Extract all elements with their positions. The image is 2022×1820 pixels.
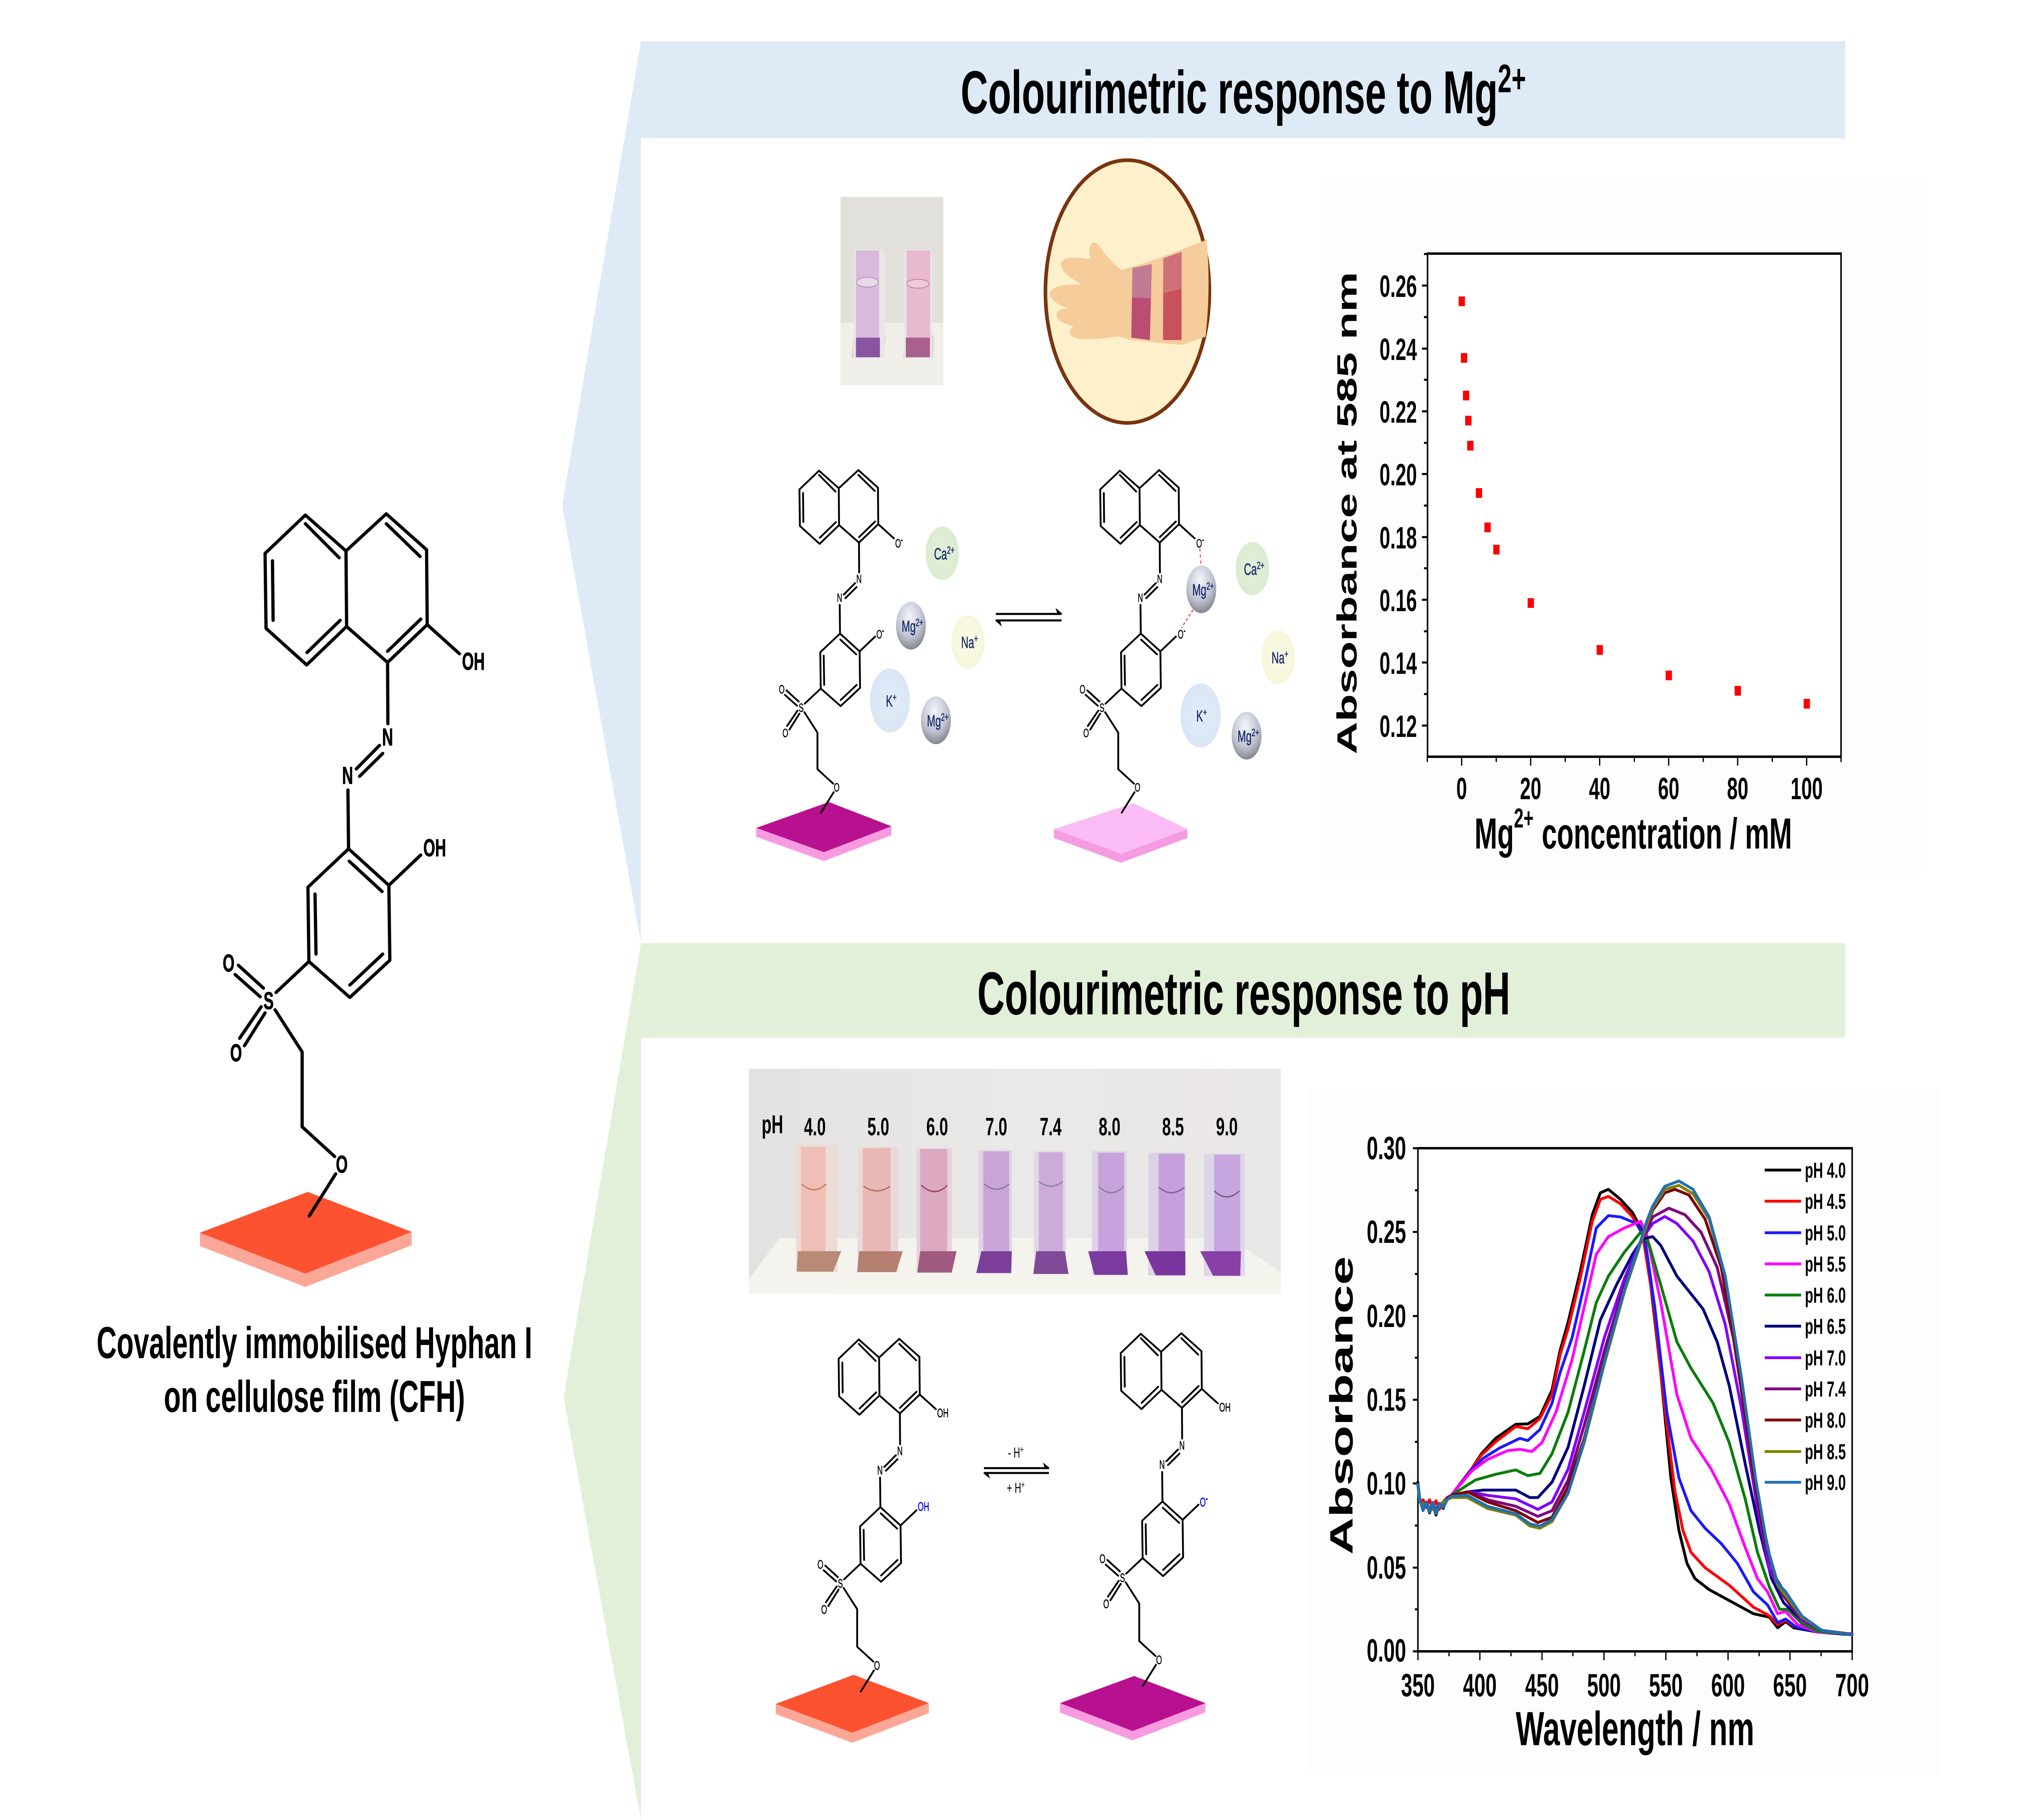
ions: left group: 2+ (941, 711, 948, 723)
x tick labels: 60 (1658, 772, 1679, 806)
axis title x: Mg (1474, 809, 1514, 858)
ions: right group: Mg (1192, 581, 1206, 599)
x tick labels (1456, 772, 1823, 806)
molecule: protonated dye: O (817, 1558, 823, 1572)
molecule: Hyphan I: O (223, 950, 235, 977)
pH labels: 5.0 (867, 1113, 889, 1141)
ions: left group: 2+ (916, 616, 923, 629)
legend: pH 6.0 (1805, 1283, 1846, 1308)
x tick labels: 400 (1463, 1668, 1497, 1704)
arrow: pH equilibrium (983, 1445, 1050, 1496)
film plate: pink, Mg bound (1054, 803, 1187, 863)
ions: right group: K (1196, 707, 1203, 726)
molecule: deprotonated dye, left (779, 470, 903, 813)
heading: Mg response (641, 41, 1845, 138)
x tick labels: 450 (1525, 1668, 1559, 1704)
arrow: pH equilibrium: + (1020, 1445, 1024, 1455)
x tick labels: 700 (1835, 1668, 1869, 1704)
arrow: pH equilibrium: + (1021, 1480, 1025, 1490)
molecule: deprotonated dye, left: - (901, 535, 903, 545)
molecule: Mg complex, right: O (1080, 683, 1085, 696)
ions: right group: 2+ (1257, 559, 1264, 571)
ions: right group: + (1203, 706, 1207, 718)
axis title y: Absorbance at 585 nm (1332, 272, 1362, 754)
axis title x: Wavelength / nm (1516, 1702, 1754, 1756)
y tick labels: 0.18 (1379, 521, 1417, 555)
pH labels: 6.0 (926, 1113, 948, 1141)
legend: pH 4.5 (1805, 1189, 1846, 1214)
molecule: deprotonated dye, left: O (779, 683, 785, 696)
ions: left group: K (886, 692, 893, 711)
dashed coordination bonds (1182, 548, 1201, 628)
molecule: Mg complex, right: S (1100, 702, 1104, 715)
y tick labels (1379, 270, 1417, 744)
x tick labels: 40 (1589, 772, 1610, 806)
heading: pH response: Colourimetric response to pH (977, 959, 1510, 1027)
molecule: Mg complex, right: - (1202, 535, 1204, 545)
pH labels: 8.5 (1162, 1113, 1184, 1141)
film plate: red (200, 1192, 412, 1287)
x tick labels: 100 (1791, 772, 1823, 806)
pH labels: 7.4 (1040, 1113, 1062, 1141)
y tick labels: 0.25 (1367, 1214, 1406, 1250)
molecule: Hyphan I: S (264, 987, 274, 1014)
molecule: Hyphan I: N (382, 724, 393, 751)
arrow: Mg equilibrium (995, 608, 1063, 626)
molecule: Mg complex, right: O (1083, 727, 1089, 740)
molecule: deprotonated dye: O (1100, 1552, 1105, 1566)
legend: pH 7.0 (1805, 1346, 1846, 1370)
molecule: deprotonated dye: O (1200, 1496, 1206, 1509)
heading: pH response (641, 943, 1845, 1038)
x tick labels: 500 (1587, 1668, 1621, 1704)
film plate: magenta, deprotonated (1060, 1676, 1206, 1740)
molecule: protonated dye: OH (918, 1500, 929, 1514)
molecule: Mg complex, right: N (1157, 573, 1162, 586)
molecule: deprotonated dye: OH (1219, 1401, 1231, 1414)
axis title x: concentration / mM (1542, 809, 1792, 858)
caption: Covalently immobilised Hyphan I (97, 1318, 532, 1368)
x tick labels: 550 (1649, 1668, 1683, 1704)
legend: pH 5.5 (1805, 1252, 1846, 1276)
x tick labels: 650 (1773, 1668, 1807, 1704)
panel: Mg response arrow background (562, 41, 641, 943)
molecule: Mg complex, right: O (1135, 781, 1140, 794)
y tick labels: 0.16 (1379, 584, 1417, 618)
molecule: Hyphan I: N (342, 762, 353, 789)
legend: pH 8.0 (1805, 1408, 1846, 1433)
molecule: deprotonated dye, left: O (895, 537, 901, 550)
ions: left group: 2+ (947, 544, 954, 556)
molecule: deprotonated dye: - (1206, 1494, 1208, 1504)
legend: pH 7.4 (1805, 1377, 1846, 1401)
ions: left group (870, 527, 985, 744)
film plate: dark magenta, Mg free (756, 802, 891, 861)
molecule: deprotonated dye: N (1159, 1458, 1165, 1472)
spectra curves (1418, 1181, 1852, 1635)
y tick labels: 0.15 (1367, 1382, 1406, 1418)
x tick labels: 350 (1401, 1668, 1435, 1704)
molecule: Mg complex, right: O (1196, 537, 1202, 550)
ions: left group: Mg (902, 618, 916, 636)
molecule: deprotonated dye: O (1156, 1653, 1162, 1667)
y tick labels: 0.26 (1379, 270, 1417, 304)
axis title y: Absorbance (1323, 1256, 1360, 1555)
molecule: protonated dye: N (877, 1464, 883, 1477)
ions: right group: + (1284, 648, 1288, 660)
molecule: deprotonated dye, left: - (882, 626, 884, 636)
molecule: deprotonated dye: N (1179, 1439, 1185, 1452)
panel: pH response arrow background (564, 943, 641, 1820)
pH labels: 8.0 (1099, 1113, 1121, 1141)
x tick labels: 600 (1711, 1668, 1745, 1704)
data points (1459, 296, 1810, 709)
ions: right group: 2+ (1252, 726, 1259, 739)
y tick labels: 0.20 (1367, 1298, 1406, 1334)
molecule: protonated dye: N (897, 1445, 903, 1458)
heading: Mg response: 2+ (1498, 57, 1526, 101)
y tick labels: 0.14 (1379, 647, 1417, 681)
pH labels: 7.0 (986, 1113, 1007, 1141)
heading: Mg response: Colourimetric response to Mg (961, 58, 1498, 126)
ions: right group (1180, 542, 1295, 760)
molecule: deprotonated dye: S (1120, 1571, 1125, 1585)
y tick labels: 0.05 (1367, 1550, 1406, 1586)
arrow: pH equilibrium: - H (1008, 1445, 1020, 1461)
molecule: protonated dye (817, 1339, 948, 1691)
molecule: protonated dye: S (838, 1577, 843, 1591)
y tick labels: 0.22 (1379, 396, 1417, 430)
photo: pH cuvette series (749, 1069, 1281, 1294)
molecule: Hyphan I: O (230, 1039, 242, 1067)
caption: on cellulose film (CFH) (164, 1372, 465, 1422)
molecule: protonated dye: O (821, 1603, 827, 1617)
molecule: deprotonated dye: O (1103, 1598, 1109, 1611)
molecule: Hyphan I: OH (423, 834, 446, 861)
y tick labels (1367, 1130, 1406, 1669)
x tick labels: 80 (1727, 772, 1748, 806)
ions: left group: Mg (927, 712, 941, 730)
molecule: Mg complex, right: N (1138, 592, 1143, 605)
chart: absorbance vs Mg concentration (1322, 178, 1921, 874)
y tick labels: 0.12 (1379, 710, 1417, 744)
legend: pH 6.5 (1805, 1314, 1846, 1339)
molecule: protonated dye: OH (937, 1407, 948, 1420)
molecule: deprotonated dye, left: N (837, 592, 842, 605)
axis title x: 2+ (1514, 803, 1533, 834)
pH labels: 9.0 (1216, 1113, 1238, 1141)
molecule: protonated dye: O (874, 1659, 880, 1673)
y tick labels: 0.10 (1367, 1466, 1406, 1502)
legend: pH 5.0 (1805, 1221, 1846, 1245)
y tick labels: 0.24 (1379, 333, 1417, 367)
y tick labels: 0.30 (1367, 1130, 1406, 1166)
molecule: Hyphan I: OH (462, 648, 485, 675)
photo: wearable film on baby doll arm (1045, 160, 1210, 423)
arrow: pH equilibrium: + H (1007, 1480, 1021, 1496)
legend: pH 8.5 (1805, 1439, 1846, 1464)
film plate: red, protonated (776, 1675, 929, 1743)
molecule: deprotonated dye, left: O (783, 727, 788, 740)
ions: left group: + (893, 691, 897, 703)
ions: right group: Na (1271, 649, 1284, 667)
chart: absorbance spectra vs pH (1309, 1088, 1941, 1776)
ions: right group: Ca (1244, 561, 1257, 579)
photo: two cuvettes (840, 197, 943, 385)
molecule: deprotonated dye, left: S (799, 702, 804, 715)
legend: pH 9.0 (1805, 1470, 1846, 1495)
ions: left group: + (974, 633, 978, 645)
molecule: deprotonated dye, left: O (876, 628, 882, 641)
x tick labels (1401, 1668, 1869, 1704)
legend: pH 4.0 (1805, 1158, 1846, 1183)
molecule: deprotonated dye, left: O (834, 781, 840, 794)
pH labels: pH (761, 1111, 783, 1139)
panel: immobilised Hyphan I (97, 514, 532, 1422)
ions: left group: Na (961, 634, 974, 652)
pH labels (761, 1111, 1238, 1141)
molecule: Hyphan I: O (336, 1151, 348, 1178)
y tick labels: 0.00 (1367, 1633, 1406, 1669)
ions: right group: Mg (1237, 728, 1252, 746)
ions: right group: 2+ (1206, 580, 1214, 592)
molecule: Mg complex, right: - (1184, 626, 1185, 636)
ions: left group: Ca (934, 545, 947, 563)
y tick labels: 0.20 (1379, 458, 1417, 492)
pH labels: 4.0 (804, 1113, 826, 1141)
molecule: deprotonated dye (1100, 1333, 1231, 1686)
molecule: Mg complex, right: O (1178, 628, 1184, 641)
molecule: Mg complex, right (1080, 470, 1204, 813)
x tick labels: 0 (1456, 772, 1467, 806)
x tick labels: 20 (1520, 772, 1541, 806)
molecule: deprotonated dye, left: N (857, 573, 862, 586)
legend (1765, 1158, 1846, 1495)
molecule: Hyphan I (223, 514, 485, 1216)
